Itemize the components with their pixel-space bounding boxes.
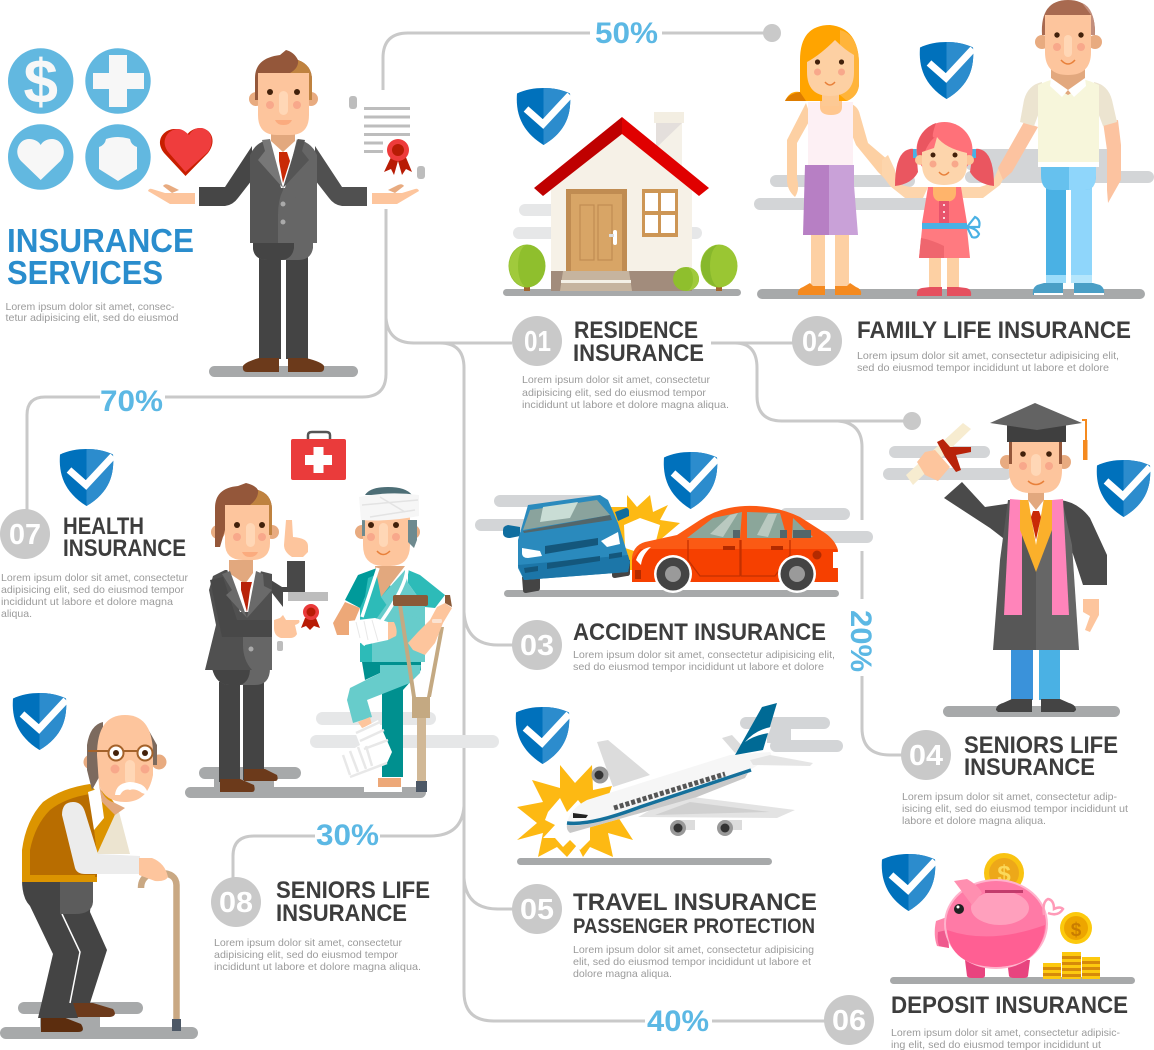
far wing and engine [597,740,650,787]
percent: 70%: 70% [100,385,163,418]
agent [205,483,329,792]
section 03: accident insurance: sed do eiusmod tempor incididunt ut labore et dolore [573,661,824,673]
illustration: old man with cane [0,715,198,1039]
section 02: family life insurance [792,316,1131,374]
near wing and engines [638,795,795,818]
head [84,754,98,770]
fuselage [567,752,771,833]
section 05: travel insurance [512,884,817,980]
crutch [398,605,416,697]
section 03: accident insurance: ACCIDENT INSURANCE [573,619,826,646]
patient [333,487,452,792]
section 07: health insurance: HEALTH [63,513,144,540]
section 08: seniors life insurance left: incididunt ut labore et dolore magna aliqua. [214,961,421,973]
icon: shield [85,124,151,190]
figure: agent with heart and certificate [148,50,419,377]
sleeve [62,802,140,874]
section 01: residence insurance: RESIDENCE [574,317,698,344]
illustration: graduate [883,403,1120,717]
section 05: travel insurance: PASSENGER PROTECTION [573,915,815,938]
raised leg [347,665,421,723]
shield: family [920,42,973,99]
intro text [6,301,179,324]
section 07: health insurance [0,509,188,620]
section 04: seniors life insurance right: INSURANCE [964,754,1095,781]
illustration: car accident [475,495,873,597]
section 06: deposit insurance: DEPOSIT INSURANCE [891,992,1128,1019]
title: SERVICES [7,254,163,291]
figure: girl [882,122,1008,296]
section 05: travel insurance: elit, sed do eiusmod tempor incididunt ut labore et [573,956,811,968]
section 01: residence insurance: Lorem ipsum dolor sit amet, consectetur [522,374,711,386]
starburst [517,765,633,857]
section 04: seniors life insurance right: Lorem ipsum dolor sit amet, consectetur adip- [902,791,1118,803]
section 02: family life insurance: Lorem ipsum dolor sit amet, consectetur adipisicing elit, [857,350,1119,362]
illustration: health agent and patient [185,432,499,798]
section 07: health insurance: Lorem ipsum dolor sit amet, consectetur [1,572,188,584]
section 02: family life insurance: FAMILY LIFE INSURANCE [857,317,1131,344]
section 02: family life insurance: 02 [802,326,832,358]
shield: residence [517,88,570,145]
coin stacks [1043,952,1100,979]
figure: father [998,0,1121,295]
section 06: deposit insurance: 06 [832,1005,866,1037]
section 05: travel insurance: dolore magna aliqua. [573,968,672,980]
section 04: seniors life insurance right: 04 [909,740,943,772]
intro text: Lorem ipsum dolor sit amet, consec- [6,301,175,313]
section 05: travel insurance: 05 [520,894,554,926]
section 07: health insurance: 07 [9,519,41,551]
percent: 40%: 40% [647,1005,709,1038]
connector end dot: 50% [763,24,781,42]
section 03: accident insurance: 03 [520,630,554,662]
coin [1060,912,1092,944]
section 08: seniors life insurance left: adipisicing elit, sed do eiusmod tempor [214,949,399,961]
percent: 30%: 30% [316,819,379,852]
shield: accident [664,452,717,509]
section 04: seniors life insurance right: SENIORS LIFE [964,732,1118,759]
section 05: travel insurance: TRAVEL INSURANCE [573,889,817,916]
cane [141,873,181,1031]
section 01: residence insurance [512,316,729,411]
raised arm [944,482,1012,545]
icon: dollar [8,48,73,117]
icon group: service icons [8,48,151,190]
blue car [503,495,630,593]
coin: $ [1071,920,1082,941]
section 08: seniors life insurance left: SENIORS LIFE [276,877,430,904]
icon: certificate [349,96,425,179]
right sleeve [1060,500,1107,585]
section 08: seniors life insurance left: 08 [219,887,253,919]
section 08: seniors life insurance left [211,877,430,973]
icon: dollar: $ [23,48,58,117]
ground [757,289,1145,299]
tail fin [735,703,777,755]
leg cast [343,720,392,777]
section 04: seniors life insurance right: labore et dolore magna aliqua. [902,815,1046,827]
section 06: deposit insurance: Lorem ipsum dolor sit amet, consectetur adipisic- [891,1027,1120,1039]
coin in slot: $ [997,861,1011,888]
section 06: deposit insurance [824,992,1128,1050]
shield: travel [516,707,569,764]
pig [935,879,1063,978]
illustration: airplane [517,703,843,865]
head [1000,455,1014,469]
figure: mother [785,25,894,295]
section 07: health insurance: adipisicing elit, sed do eiusmod tempor [1,584,185,596]
neck [375,566,405,597]
head [355,525,369,539]
icon: heart [8,124,73,190]
torso [360,597,425,662]
intro text: tetur adipisicing elit, sed do eiusmod [6,312,179,324]
connector end dot: 20% [903,412,921,430]
cap [1007,419,1066,442]
section 07: health insurance: aliqua. [1,608,32,620]
icon: red heart [160,128,213,176]
vest [22,784,115,882]
diploma [906,423,971,485]
percent: 50%: 50% [595,17,658,50]
section 05: travel insurance: Lorem ipsum dolor sit amet, consectetur adipisicing [573,944,814,956]
sling [362,568,407,645]
standing leg [362,662,421,777]
stole [1004,499,1022,615]
section 01: residence insurance: 01 [524,326,551,358]
section 07: health insurance: INSURANCE [63,535,186,562]
clouds [754,149,1154,210]
illustration: family [754,0,1154,299]
illustration: piggy bank [890,853,1135,984]
shield: seniors right [1097,460,1150,517]
left sleeve [345,568,377,610]
icon: plus [85,48,151,114]
left arm [333,602,360,635]
section 04: seniors life insurance right [901,730,1128,827]
section 01: residence insurance: INSURANCE [573,340,704,367]
shield: deposit [882,854,935,911]
robe [993,500,1036,650]
hand right [1083,599,1099,632]
stabilizer [750,755,813,766]
title [7,222,194,291]
shield: seniors left [13,693,66,750]
red car [632,506,839,593]
shield: health [60,449,113,506]
section 01: residence insurance: adipisicing elit, sed do eiusmod tempor [522,387,707,399]
right forearm [408,603,452,655]
percent: 20%: 20% [844,610,877,672]
illustration: house [503,112,741,296]
first aid kit [291,432,346,480]
section 03: accident insurance: Lorem ipsum dolor sit amet, consectetur adipisicing elit, [573,649,835,661]
explosion [608,495,680,570]
title: INSURANCE [7,222,194,259]
section 07: health insurance: incididunt ut labore et dolore magna [1,596,173,608]
section 03: accident insurance [512,619,835,673]
coin in slot [984,853,1024,893]
section 08: seniors life insurance left: INSURANCE [276,900,407,927]
connector lines [27,33,905,1021]
certificate held [283,592,329,636]
section 02: family life insurance: sed do eiusmod tempor incididunt ut labore et dolore [857,362,1109,374]
section 08: seniors life insurance left: Lorem ipsum dolor sit amet, consectetur [214,937,403,949]
section 04: seniors life insurance right: isicing elit, sed do eiusmod tempor incididunt ut [902,803,1128,815]
section 01: residence insurance: incididunt ut labore et dolore magna aliqua. [522,399,729,411]
right shoulder [408,570,445,608]
